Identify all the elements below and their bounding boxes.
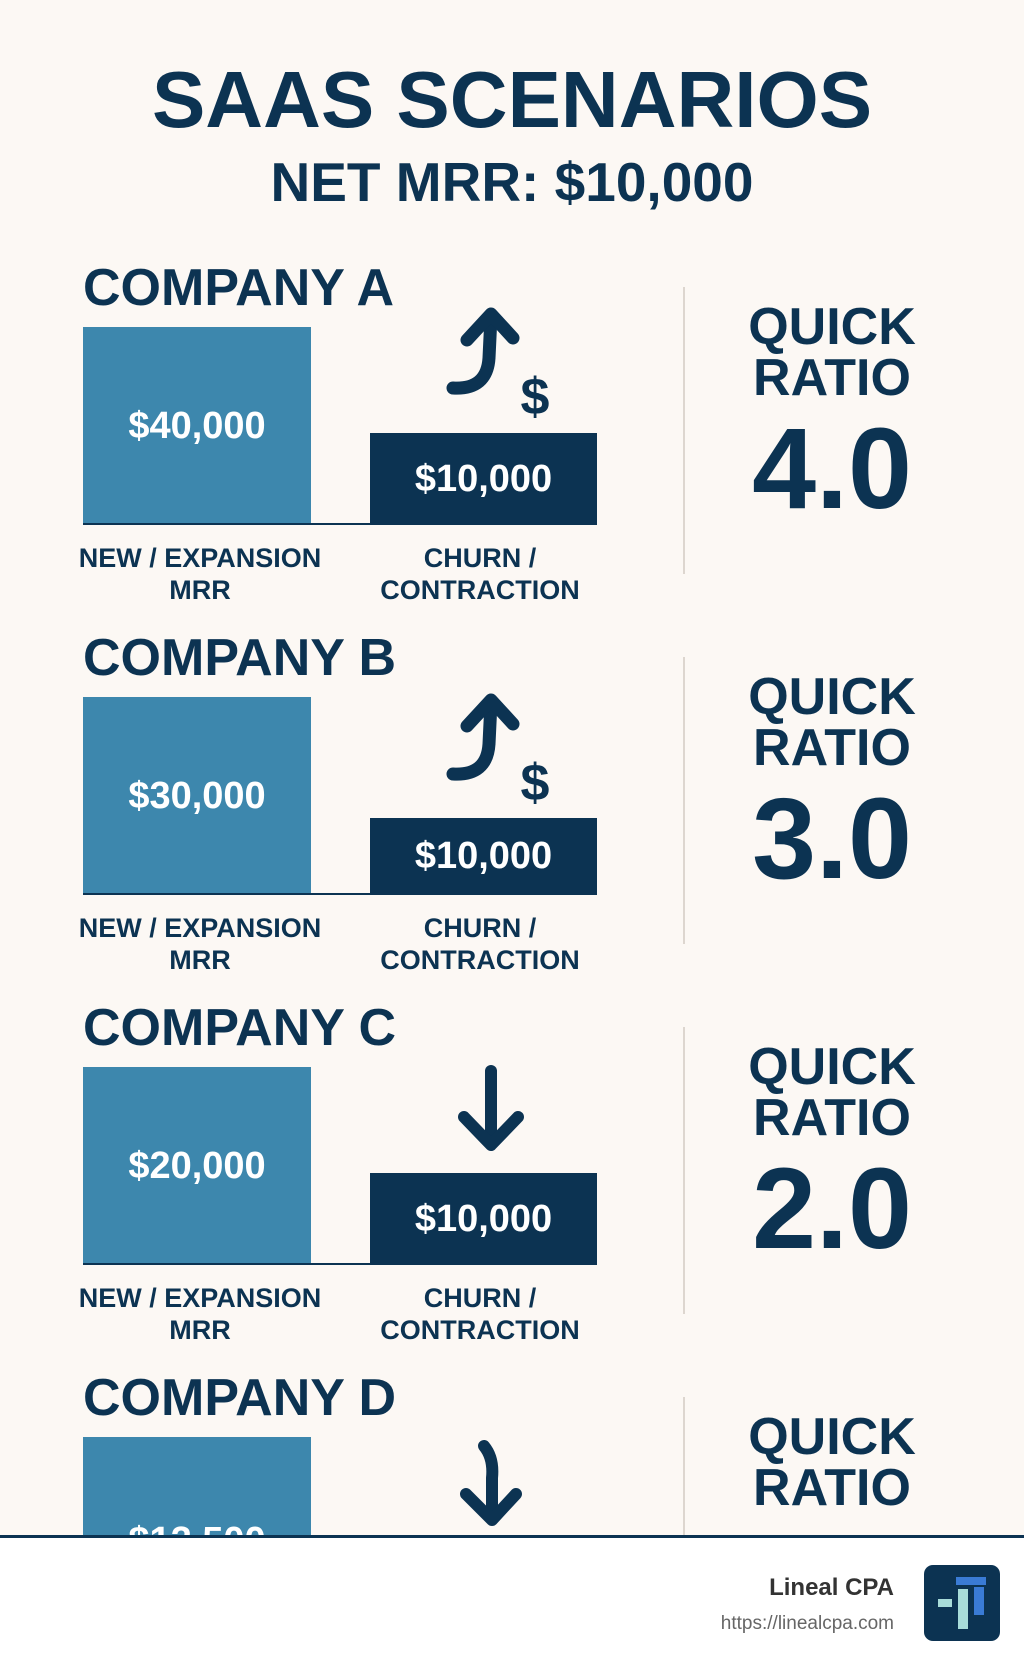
panel: company C xyxy=(79,999,916,1345)
label churn: CHURN / xyxy=(424,913,536,943)
bar: new/expansion: $20,000 xyxy=(128,1144,266,1186)
url: https://linealcpa.com xyxy=(721,1613,894,1634)
brand name: Lineal CPA xyxy=(769,1574,894,1601)
bar: new/expansion xyxy=(83,327,311,524)
bar: churn xyxy=(370,818,597,894)
icon: curved down arrow xyxy=(460,1440,522,1526)
title: SAAS SCENARIOS xyxy=(152,55,872,144)
bar: churn: $10,000 xyxy=(415,458,552,500)
label new xyxy=(79,543,321,605)
quick ratio label xyxy=(748,1408,916,1517)
label churn: CHURN / xyxy=(424,543,536,573)
panel: company A xyxy=(79,259,916,605)
label new xyxy=(79,1283,321,1345)
quick ratio label: QUICK xyxy=(748,298,916,356)
quick ratio label xyxy=(748,668,916,777)
label churn xyxy=(380,1283,580,1345)
footer xyxy=(0,1535,1024,1666)
label new: MRR xyxy=(169,1315,231,1345)
icon: up arrow with dollar xyxy=(446,694,550,807)
heading: COMPANY D xyxy=(83,1369,396,1427)
icon: up arrow with dollar xyxy=(446,308,550,421)
quick ratio label: RATIO xyxy=(753,349,911,407)
icon: down arrow xyxy=(458,1065,524,1151)
heading: COMPANY C xyxy=(83,999,396,1057)
label churn: CHURN / xyxy=(424,1283,536,1313)
label new xyxy=(79,913,321,975)
label new: MRR xyxy=(169,575,231,605)
bar: new/expansion xyxy=(83,1067,311,1264)
quick ratio label xyxy=(748,298,916,407)
panel: company B xyxy=(79,629,916,975)
label new: NEW / EXPANSION xyxy=(79,1283,321,1313)
panel: company D xyxy=(83,1369,916,1536)
quick ratio label: RATIO xyxy=(753,1089,911,1147)
bar: new/expansion xyxy=(83,1437,311,1634)
quick ratio label: QUICK xyxy=(748,1408,916,1466)
bar: new/expansion: $40,000 xyxy=(128,404,266,446)
subtitle: NET MRR: $10,000 xyxy=(271,151,753,213)
label new: MRR xyxy=(169,945,231,975)
heading: COMPANY A xyxy=(83,259,394,317)
label churn: CONTRACTION xyxy=(380,945,580,975)
label churn xyxy=(380,543,580,605)
ratio value: 3.0 xyxy=(752,775,912,903)
label churn xyxy=(380,913,580,975)
quick ratio label: QUICK xyxy=(748,1038,916,1096)
bar: churn: $10,000 xyxy=(415,835,552,877)
bar: churn xyxy=(370,1173,597,1264)
quick ratio label: QUICK xyxy=(748,668,916,726)
bar: new/expansion xyxy=(83,697,311,894)
heading: COMPANY B xyxy=(83,629,396,687)
label new: NEW / EXPANSION xyxy=(79,913,321,943)
icon: logo xyxy=(924,1565,1000,1641)
bar: new/expansion: $30,000 xyxy=(128,774,266,816)
label churn: CONTRACTION xyxy=(380,575,580,605)
bar: churn: $10,000 xyxy=(415,1198,552,1240)
bar: churn xyxy=(370,433,597,524)
quick ratio label: RATIO xyxy=(753,1459,911,1517)
ratio value: 2.0 xyxy=(752,1145,912,1273)
quick ratio label: RATIO xyxy=(753,719,911,777)
label new: NEW / EXPANSION xyxy=(79,543,321,573)
ratio value: 4.0 xyxy=(752,405,912,533)
label churn: CONTRACTION xyxy=(380,1315,580,1345)
quick ratio label xyxy=(748,1038,916,1147)
